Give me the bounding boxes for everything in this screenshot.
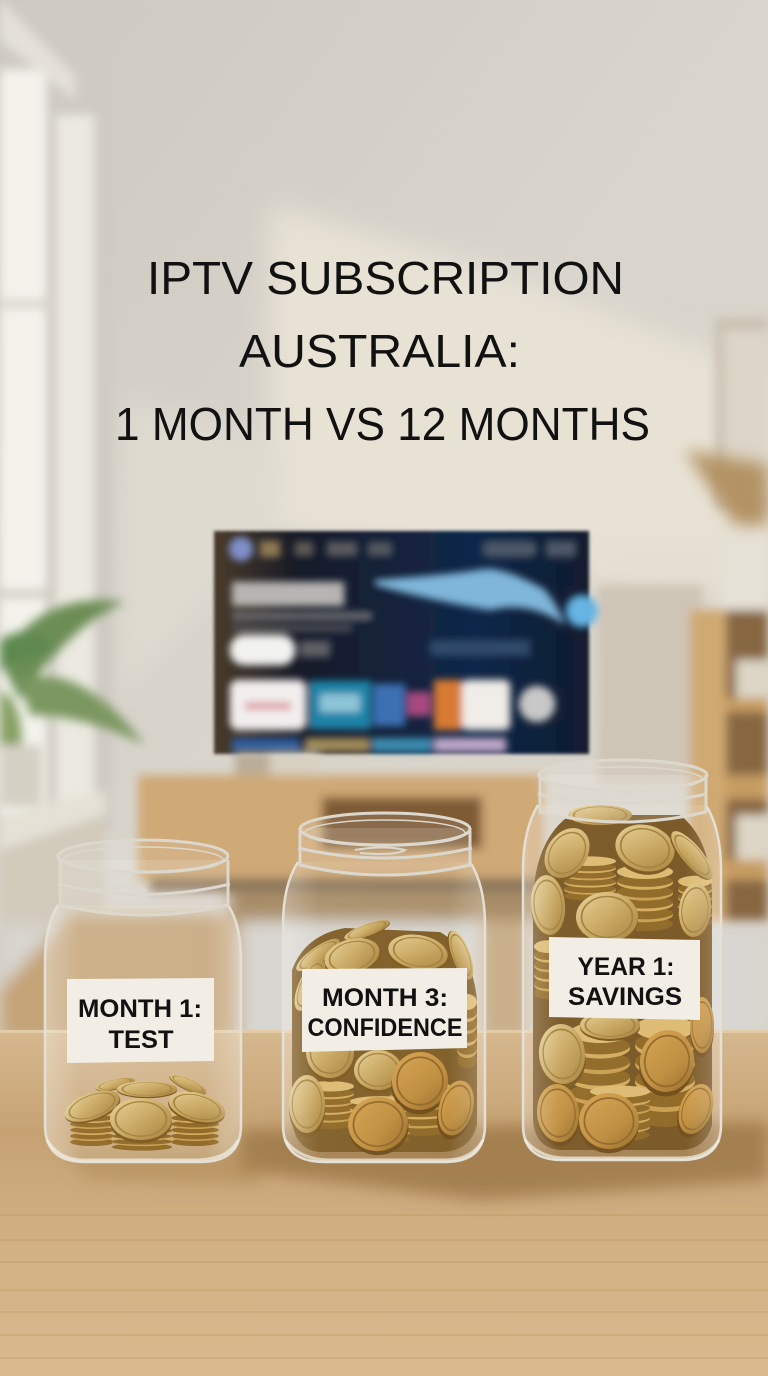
title: IPTV SUBSCRIPTION	[147, 252, 624, 304]
television	[214, 531, 598, 754]
jar 3 label	[549, 937, 700, 1020]
floor	[0, 880, 768, 1045]
wall picture, shelf and dried flowers	[598, 318, 768, 920]
title: AUSTRALIA:	[239, 325, 520, 377]
jar 3 neck	[538, 760, 707, 822]
jar 3: year 1 savings	[523, 760, 721, 1160]
jar 3 label: YEAR 1:	[578, 953, 674, 981]
coins jar 3	[528, 805, 720, 1156]
jar 1: month 1 test	[45, 840, 241, 1162]
window on the left	[0, 0, 112, 990]
jar 1 label	[67, 978, 214, 1063]
jar 2 label: CONFIDENCE	[308, 1014, 462, 1042]
dried flowers	[685, 450, 768, 525]
tv screen content (blurred)	[229, 537, 598, 752]
jar 2 neck	[298, 813, 472, 875]
jar 2 label: MONTH 3:	[322, 984, 448, 1012]
title: 1 MONTH VS 12 MONTHS	[115, 398, 650, 450]
table shadows	[60, 1122, 768, 1200]
tv stand and media console	[138, 752, 543, 892]
wooden table	[0, 1030, 768, 1376]
jar 1 label: MONTH 1:	[78, 995, 202, 1023]
coins jar 2	[288, 916, 480, 1159]
jar 2: month 3 confidence	[283, 813, 485, 1162]
jar 3 label: SAVINGS	[568, 983, 682, 1011]
sunlight patch on wall	[120, 205, 768, 700]
jar 1 label: TEST	[108, 1026, 174, 1054]
jar 2 label	[302, 968, 467, 1052]
blurred plant	[0, 600, 145, 807]
title	[115, 252, 650, 450]
coins jar 1	[60, 1071, 229, 1151]
background: living room wall	[0, 0, 768, 1040]
jar 1 neck	[58, 840, 230, 915]
